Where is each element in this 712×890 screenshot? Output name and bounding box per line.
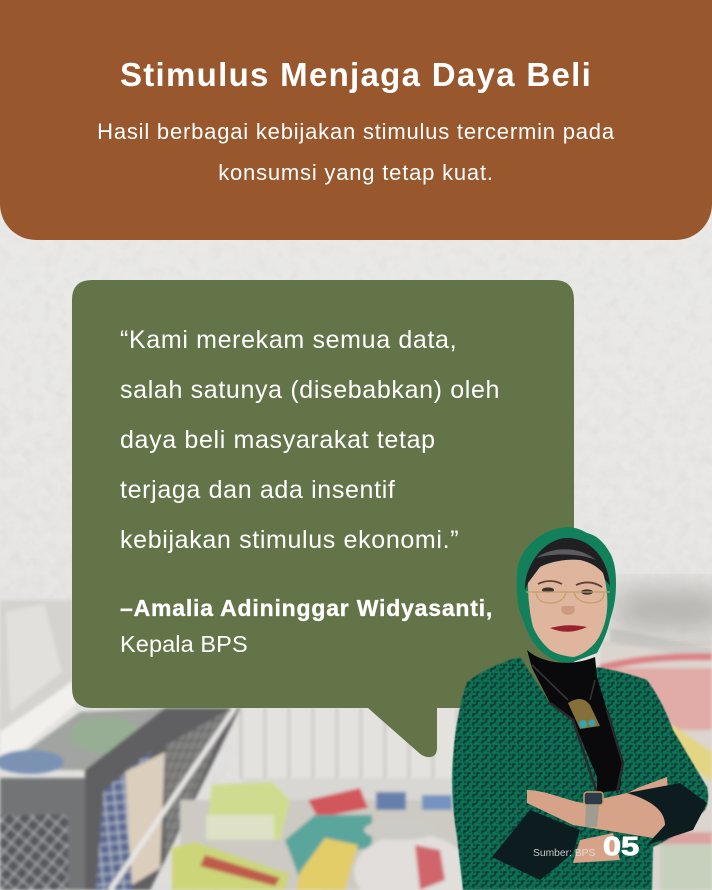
right sleeve cuff	[627, 783, 707, 845]
jacket	[452, 657, 708, 890]
freezer right	[600, 640, 712, 890]
attribution: Kepala BPS	[120, 631, 248, 657]
inner cap	[525, 538, 610, 590]
portrait: Amalia Adininggar Widyasanti	[451, 527, 709, 890]
quote text: kebijakan stimulus ekonomi.”	[120, 526, 459, 554]
left background mid	[0, 708, 175, 770]
quote text	[120, 326, 500, 554]
brows and eyes	[538, 581, 602, 587]
quote text: daya beli masyarakat tetap	[120, 426, 436, 454]
header panel	[0, 0, 712, 240]
page number: 05	[603, 831, 639, 861]
nose and lips	[561, 606, 575, 615]
quote text: salah satunya (disebabkan) oleh	[120, 376, 500, 404]
left sleeve cuff	[492, 810, 580, 880]
source label: Sumber: BPS	[533, 848, 595, 859]
lower hand	[573, 833, 620, 863]
soft grey haze behind portrait	[615, 590, 712, 630]
title: Stimulus Menjaga Daya Beli	[120, 56, 592, 93]
headscarf	[517, 527, 616, 663]
quote text: terjaga dan ada insentif	[120, 476, 396, 504]
forearm upper	[527, 777, 668, 838]
subtitle	[97, 119, 615, 185]
subtitle: Hasil berbagai kebijakan stimulus tercermin pada	[97, 119, 615, 144]
quote text: “Kami merekam semua data,	[120, 326, 457, 354]
groceries	[180, 800, 480, 890]
glasses	[526, 592, 610, 603]
face	[528, 560, 607, 657]
quote speech bubble	[72, 280, 574, 758]
back rail of trolley	[240, 708, 480, 788]
jacket lapel seams	[550, 703, 623, 793]
attribution: –Amalia Adininggar Widyasanti,	[120, 595, 493, 621]
subtitle: konsumsi yang tetap kuat.	[218, 160, 494, 185]
attribution	[120, 595, 493, 657]
freezer left	[0, 600, 72, 738]
black top and collar	[527, 650, 623, 793]
watch	[584, 792, 603, 805]
necklace	[532, 665, 595, 700]
